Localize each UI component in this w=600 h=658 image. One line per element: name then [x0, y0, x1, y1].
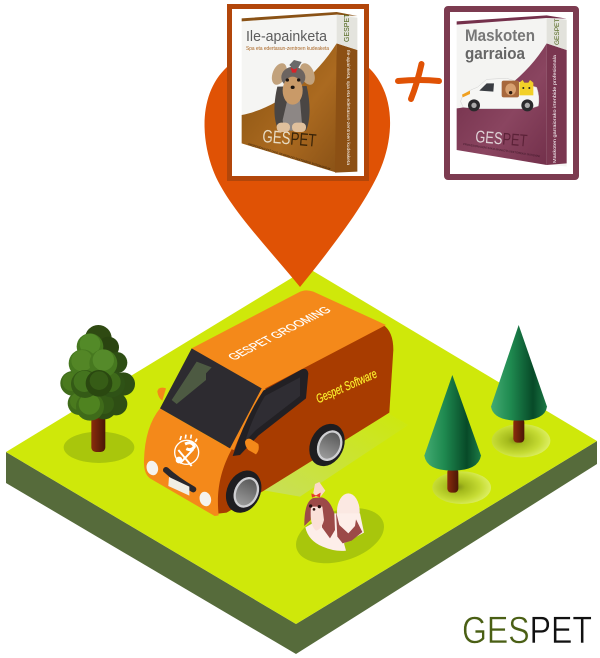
van ground shadow: [262, 413, 408, 497]
product box: Maskoten garraioa: garraioa: [465, 44, 525, 63]
isometric ground platform: [6, 268, 597, 654]
van: [144, 290, 408, 519]
windshield: [160, 348, 262, 448]
dog with ground shadow: [289, 482, 391, 573]
tree: conifer right: [491, 325, 550, 457]
icon: yorkie dog: [269, 60, 318, 132]
product box: Maskoten garraioa: GESPET: [554, 19, 561, 45]
product box: Maskoten garraioa: Maskoten garraiorako irtenbide profesionala: [552, 54, 557, 163]
product box: Ile-apainketa: Ile-apainketa: [246, 29, 328, 45]
tree: round leafy tree: [60, 325, 135, 463]
van body: [144, 290, 393, 516]
product box: Maskoten garraioa: GESPET: [475, 127, 528, 151]
front wheel: [219, 465, 268, 519]
GESPET logo: GESPET: [462, 610, 592, 652]
rear wheel: [303, 418, 351, 472]
text: van roof label: GESPET GROOMING: [224, 304, 335, 362]
product box: Ile-apainketa: Ile-apainketa, spa eta edertasun-zentroen kudeaketa: [346, 50, 351, 166]
product box: Ile-apainketa: GESPET: [344, 13, 351, 42]
product box: Ile-apainketa: [230, 6, 366, 178]
product box: Ile-apainketa: PROFESIONALENTZAKO INFORMAZIO SEKTOREKO SISTEMARIOAK: [248, 142, 331, 171]
headlights: [145, 459, 213, 508]
product box: Ile-apainketa: Spa eta edertasun-zentroen kudeaketa: [246, 46, 329, 52]
plus sign: [398, 64, 439, 99]
product box: Ile-apainketa: GESPET: [262, 126, 317, 151]
side window: [233, 369, 308, 456]
side mirror: [245, 439, 259, 454]
text: van side label: Gespet Software: [314, 367, 379, 406]
icon: white van with dog and cat: [461, 78, 539, 111]
icon: paw and scissors logo: [175, 435, 199, 466]
product box: Maskoten garraioa: Maskoten: [465, 26, 535, 45]
map pin: [205, 39, 390, 287]
product box: Maskoten garraioa: PROFESIONALENTZAKO MASKOTA SEKTOREKO SISTEMAK: [463, 142, 541, 158]
tree: conifer left: [424, 375, 491, 504]
grille and licence plate: [166, 470, 193, 496]
product box: Maskoten garraioa: [447, 9, 576, 177]
